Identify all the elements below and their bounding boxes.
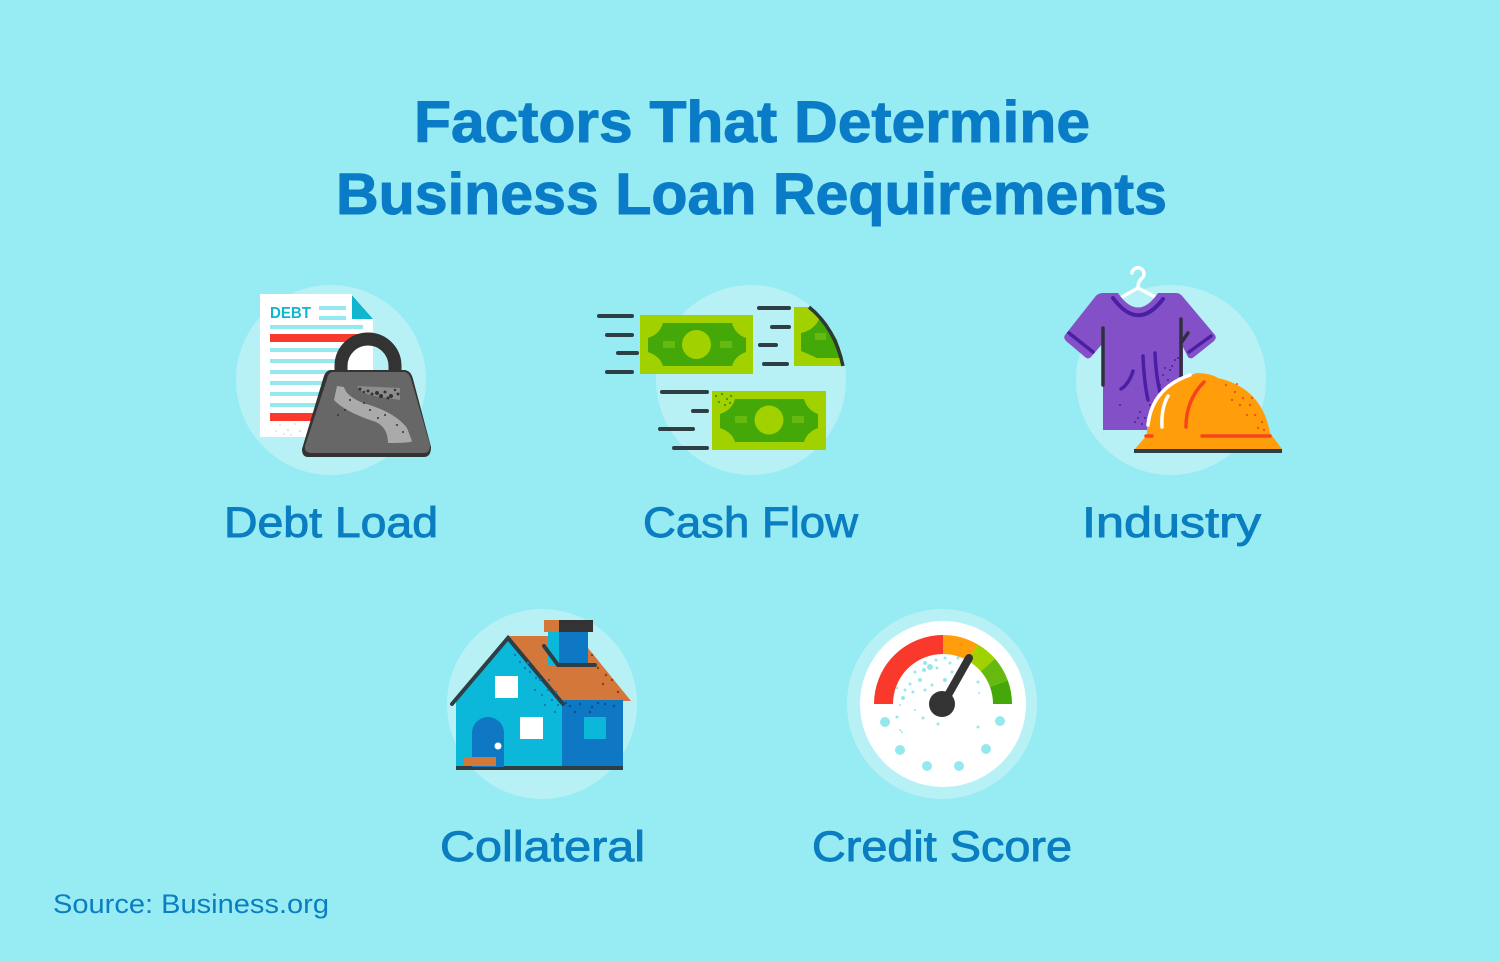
icon: motion speed lines xyxy=(599,308,789,448)
icon: dollar bill top right, cut by circle xyxy=(794,307,843,366)
panel: industry xyxy=(1064,268,1282,547)
title: Factors That Determine xyxy=(414,90,1090,155)
label: credit score: Credit Score xyxy=(812,823,1072,871)
icon: dollar bill left xyxy=(640,315,753,374)
label: debt load: Debt Load xyxy=(224,499,438,547)
icon: orange hard hat xyxy=(1134,373,1282,451)
icon background circle: credit score xyxy=(847,609,1037,799)
icon: house xyxy=(452,620,631,770)
label: collateral: Collateral xyxy=(440,823,645,871)
panel: debt load xyxy=(224,285,438,547)
title xyxy=(336,90,1167,227)
icon: debt document xyxy=(260,294,373,437)
source note: Source: Business.org xyxy=(53,889,329,919)
icon background circle: debt load xyxy=(236,285,426,475)
icon: dollar bill bottom xyxy=(712,391,826,450)
icon: credit score gauge xyxy=(860,621,1026,787)
icon: weight with dollar sign xyxy=(302,339,431,457)
panel: cash flow xyxy=(599,285,859,547)
icon background circle: industry xyxy=(1076,285,1266,475)
icon background circle: cash flow xyxy=(656,285,846,475)
icon: hanger xyxy=(1122,268,1157,298)
icon: purple t-shirt xyxy=(1064,293,1216,430)
icon: debt document: DEBT xyxy=(270,305,311,322)
label: industry: Industry xyxy=(1082,499,1262,547)
panel: credit score xyxy=(812,609,1072,871)
label: cash flow: Cash Flow xyxy=(643,499,859,547)
panel: collateral xyxy=(440,609,645,871)
icon background circle: collateral xyxy=(447,609,637,799)
title: Business Loan Requirements xyxy=(336,162,1167,227)
